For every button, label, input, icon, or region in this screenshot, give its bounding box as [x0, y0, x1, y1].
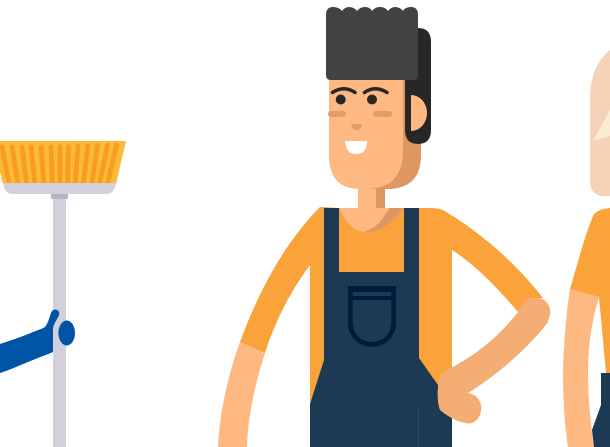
broom held by blue hand	[0, 141, 126, 447]
blue hand and arm	[0, 310, 75, 373]
back hair	[405, 28, 431, 144]
head shadow	[360, 78, 421, 189]
overalls seam	[418, 407, 420, 447]
overalls	[310, 208, 452, 447]
right forearm and hand	[438, 298, 550, 423]
smile	[345, 141, 367, 154]
shirt	[240, 207, 543, 410]
broom connector	[51, 194, 68, 199]
eyebrows	[332, 89, 387, 92]
hair highlight	[593, 110, 610, 141]
left arm skin	[218, 342, 265, 447]
overalls	[592, 373, 610, 447]
cheeks	[328, 111, 392, 117]
arm	[563, 289, 599, 447]
bib pocket	[348, 286, 396, 344]
neck	[358, 185, 385, 211]
broom handle	[53, 199, 66, 447]
broom head base	[3, 183, 116, 194]
neckline	[339, 208, 404, 232]
central worker	[218, 7, 550, 447]
nose	[351, 124, 362, 130]
right worker, partly cropped	[563, 50, 610, 447]
face	[329, 70, 403, 189]
head	[590, 50, 610, 196]
eyes	[336, 94, 377, 104]
broom bristles	[0, 141, 126, 186]
shirt	[570, 208, 610, 373]
hair top	[326, 7, 418, 80]
ear	[411, 95, 427, 131]
